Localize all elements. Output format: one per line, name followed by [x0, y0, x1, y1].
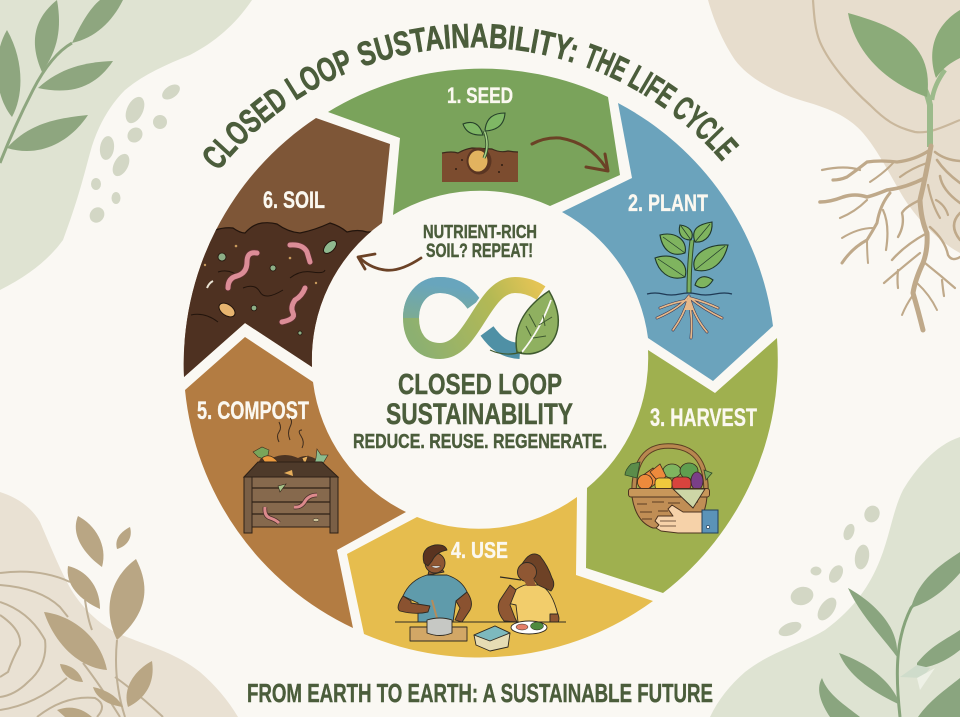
icon: compost bin with worms: [244, 418, 338, 533]
title: [203, 24, 740, 168]
background: top-left sage blob with leaves: [0, 0, 252, 290]
dark soil layer: [184, 222, 372, 377]
label: 5. compost: 5. COMPOST: [197, 397, 309, 425]
label: 6. soil: 6. SOIL: [263, 187, 325, 214]
icon: basket with hand: [625, 446, 718, 533]
title: CLOSED LOOP: [203, 50, 349, 168]
panel: 6 soil: [184, 118, 390, 377]
logo: infinity loop with leaf: [411, 285, 558, 354]
center caption: nutrient-rich soil: NUTRIENT-RICH: [423, 221, 537, 242]
tagline: REDUCE. REUSE. REGENERATE.: [353, 430, 607, 453]
label: 2. plant: 2. PLANT: [628, 190, 708, 217]
panel: 2 plant: [562, 103, 773, 381]
heading: closed loop sustainability: SUSTAINABILITY: [386, 398, 573, 431]
arrow: seed to plant: [532, 138, 608, 171]
icon: sprouting seed: [442, 113, 518, 182]
label: 1. seed: 1. SEED: [447, 83, 513, 108]
soil worms and microbes: [204, 238, 339, 335]
panel: 4 use: [347, 497, 653, 658]
heading: closed loop sustainability: [386, 369, 573, 431]
background: bottom-right sage blob with leaves: [710, 437, 960, 717]
panel: 1 seed: [328, 69, 620, 215]
title: THE LIFE CYCLE: [586, 43, 740, 162]
arrow: back to soil: [358, 254, 421, 270]
title: SUSTAINABILITY:: [357, 24, 578, 66]
icon: people cooking and eating: [395, 545, 566, 651]
panel: 3 harvest: [586, 338, 778, 593]
panel: 5 compost: [185, 337, 406, 628]
background: bottom-left tan blob with leaves and contour lines: [0, 492, 238, 717]
label: 3. harvest: 3. HARVEST: [650, 404, 757, 432]
label: 4. use: 4. USE: [451, 537, 508, 563]
footer caption: FROM EARTH TO EARTH: A SUSTAINABLE FUTURE: [247, 678, 713, 708]
icon: plant with roots: [647, 222, 732, 338]
center caption: nutrient-rich soil: [423, 221, 537, 262]
background: top-right tan blob with sprout and roots: [708, 0, 960, 330]
center caption: nutrient-rich soil: SOIL? REPEAT!: [426, 241, 533, 262]
heading: closed loop sustainability: CLOSED LOOP: [398, 369, 562, 401]
